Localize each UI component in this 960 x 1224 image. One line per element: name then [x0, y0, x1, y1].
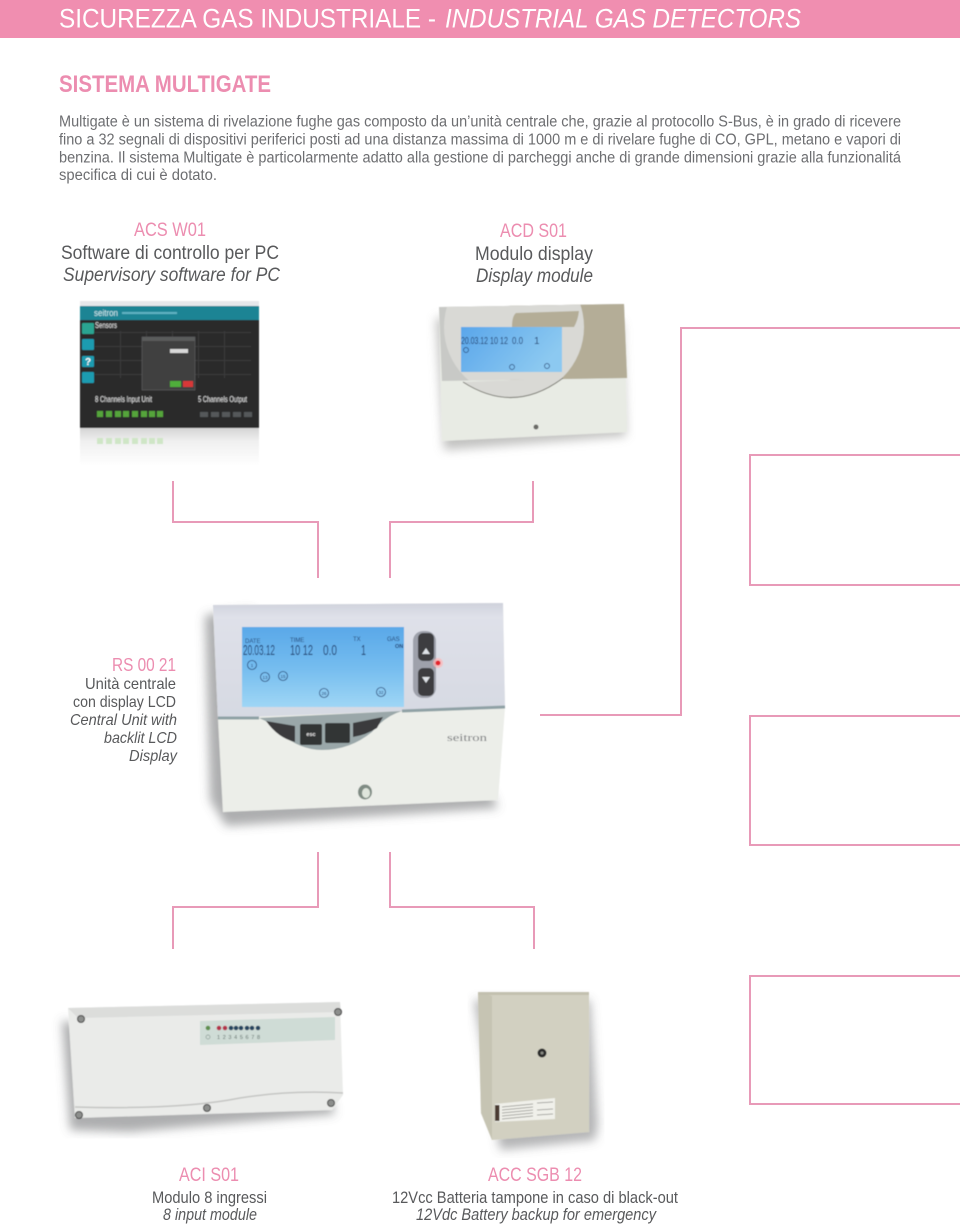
display module [431, 304, 631, 455]
connector: display module to central unit [390, 481, 533, 578]
display module: 20.03.12 [461, 336, 488, 347]
label: RS 00 21: con display LCD [73, 694, 176, 711]
central unit device: TX [353, 637, 361, 643]
software screenshot [80, 301, 259, 466]
central unit device: 1 [361, 642, 366, 659]
intro text block [59, 114, 901, 184]
display module: 10 12 [490, 336, 508, 347]
label: ACC SGB 12: ACC SGB 12 [488, 1165, 582, 1186]
label: RS 00 21: Display [129, 748, 178, 765]
intro text block: Multigate è un sistema di rivelazione fughe gas composto da un’unità centrale che, grazie al protocollo S-Bus, è in grado di ricevere [59, 114, 901, 130]
central unit device: ON [395, 644, 403, 650]
label: ACD S01: Display module [476, 266, 593, 287]
connector: central unit to right boxes [540, 328, 960, 715]
label: ACD S01: ACD S01 [500, 221, 567, 242]
label: ACS W01: ACS W01 [134, 220, 206, 241]
empty box middle right [750, 716, 960, 845]
input module device [62, 1002, 343, 1132]
central unit device: 13 [262, 675, 268, 680]
label: ACC SGB 12: 12Vdc Battery backup for emergency [416, 1206, 658, 1224]
battery enclosure device [474, 992, 598, 1150]
software screenshot: Sensors [95, 321, 117, 330]
input module device: 12345678 [217, 1035, 260, 1041]
connector: central unit to input module [173, 852, 318, 949]
header band: INDUSTRIAL GAS DETECTORS [445, 4, 801, 34]
display module: 1 [534, 336, 540, 347]
label: RS 00 21: backlit LCD [104, 730, 177, 747]
connector: central unit to battery [390, 852, 534, 949]
software screenshot: 8 Channels Input Unit [95, 395, 153, 404]
central unit device: seitron [447, 732, 488, 744]
central unit device: esc [306, 732, 316, 738]
central unit device: 20.03.12 [243, 642, 275, 659]
label: ACI S01: Modulo 8 ingressi [152, 1189, 267, 1207]
central unit device: DATE [245, 639, 261, 645]
label: ACI S01: 8 input module [163, 1206, 257, 1224]
label: RS 00 21: Central Unit with [70, 712, 177, 729]
label: ACC SGB 12: 12Vcc Batteria tampone in caso di black-out [392, 1189, 678, 1207]
label: ACI S01: ACI S01 [179, 1165, 239, 1186]
label: ACS W01: Supervisory software for PC [63, 265, 280, 286]
label: RS 00 21 [70, 654, 178, 765]
label: ACC SGB 12 [392, 1165, 678, 1224]
label: RS 00 21: RS 00 21 [112, 654, 176, 675]
connector: software to central unit [173, 481, 318, 578]
central unit device: 0.0 [323, 642, 337, 659]
software screenshot: ? [85, 357, 91, 368]
heading: SISTEMA MULTIGATE [59, 71, 271, 98]
header band: SICUREZZA GAS INDUSTRIALE - [59, 4, 436, 34]
central unit device: 1 [251, 663, 254, 668]
central unit device: TIME [290, 638, 304, 644]
header band [0, 0, 960, 38]
label: RS 00 21: Unità centrale [85, 676, 176, 693]
software screenshot: seitron [94, 308, 118, 318]
central unit device: 26 [321, 691, 327, 696]
empty box upper right [750, 455, 960, 585]
central unit device: GAS [387, 637, 400, 643]
central unit device: 32 [378, 690, 384, 695]
software screenshot: 5 Channels Output [198, 395, 248, 404]
central unit device: 15 [280, 674, 286, 679]
intro text block: specifica di cui è dotato. [59, 167, 217, 184]
central unit device [205, 603, 505, 826]
label: ACS W01 [61, 220, 280, 286]
label: ACS W01: Software di controllo per PC [61, 243, 279, 264]
label: ACD S01: Modulo display [475, 244, 593, 265]
intro text block: fino a 32 segnali di dispositivi periferici posti ad una distanza massima di 1000 m e di rivelare fughe di CO, GPL, metano e vapori di [59, 132, 901, 148]
label: ACI S01 [152, 1165, 267, 1224]
display module: 0.0 [512, 336, 523, 347]
label: ACD S01 [475, 221, 593, 287]
intro text block: benzina. Il sistema Multigate è particolarmente adatto alla gestione di parcheggi anche di grande dimensioni grazie alla funzionalitá [59, 150, 901, 166]
empty box lower right [750, 976, 960, 1104]
central unit device: 10 12 [290, 642, 313, 659]
